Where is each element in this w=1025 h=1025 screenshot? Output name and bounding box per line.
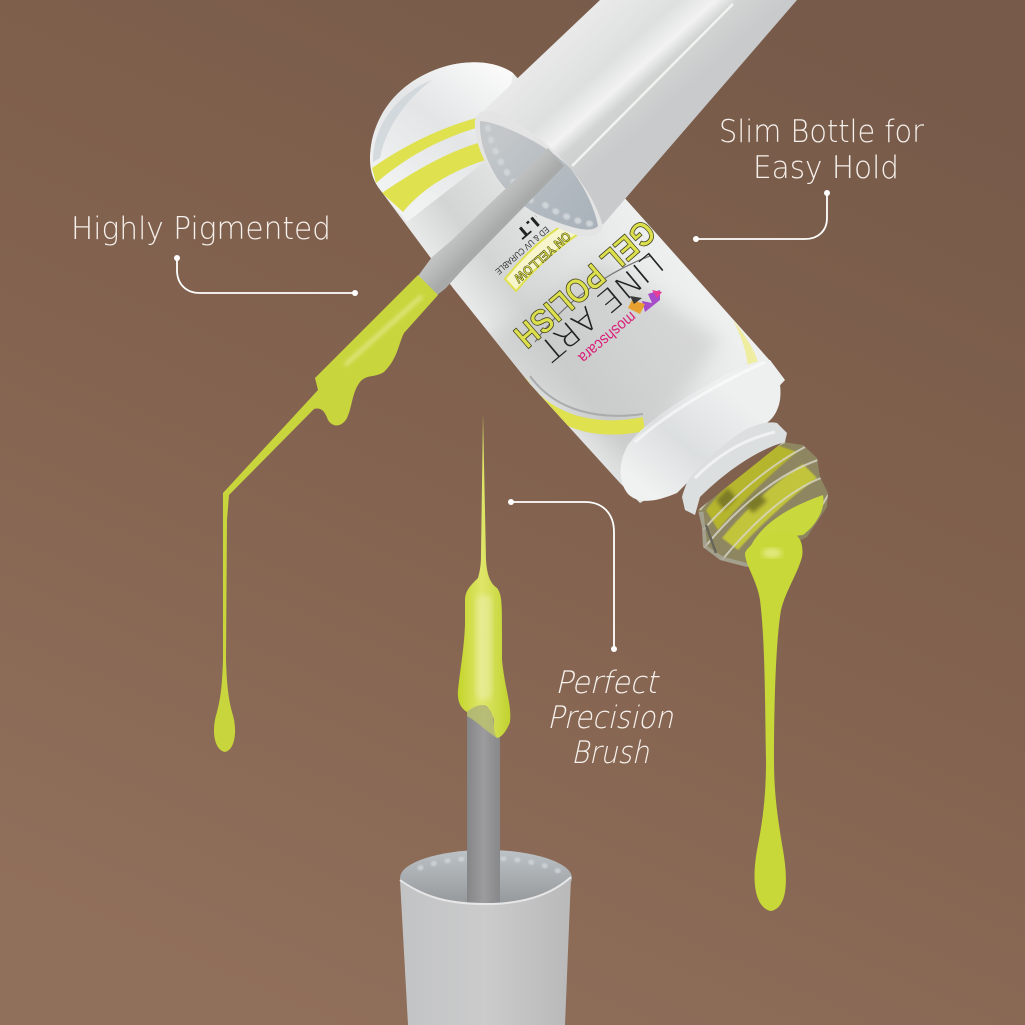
label: Easy Hold	[753, 150, 899, 186]
label: Highly Pigmented	[71, 211, 331, 247]
shoulder	[620, 360, 781, 501]
label: Perfect	[555, 665, 660, 701]
polish in opening	[747, 495, 823, 555]
leader line	[508, 499, 617, 652]
neon yellow pill: ON YELLOW	[511, 229, 574, 286]
holder rim	[400, 850, 572, 906]
UV curable text: ED & UV CURABLE	[493, 224, 551, 277]
cap tube	[475, 0, 797, 237]
drip body	[214, 275, 438, 752]
leader line	[693, 190, 830, 242]
leader line	[174, 255, 358, 296]
threaded glass neck	[698, 442, 828, 567]
bottle	[370, 62, 785, 503]
pour	[745, 532, 802, 911]
drip highlight	[345, 296, 422, 365]
volume mark: .I.T	[513, 209, 547, 242]
upper brush stem	[418, 148, 564, 296]
label: Precision	[547, 700, 673, 736]
highly pigmented brush with drip	[214, 275, 438, 752]
cap gloss line	[572, 4, 733, 166]
holder body	[400, 877, 571, 1025]
glass threads	[700, 442, 828, 567]
label: Brush	[571, 735, 649, 771]
highlight	[762, 548, 782, 558]
bottle neck and shoulder	[620, 360, 828, 567]
neck collar ring	[682, 422, 787, 515]
bottom cap holder	[400, 850, 572, 1025]
drip	[458, 414, 510, 738]
bottle label text	[493, 209, 670, 368]
moshscara brand logo	[575, 290, 662, 366]
GEL POLISH heading: GEL POLISH	[506, 212, 663, 355]
moshscara brand logo: moshscara	[575, 308, 639, 366]
LINE ART wordmark: LINE ART	[532, 244, 670, 368]
label: Slim Bottle for	[719, 114, 924, 150]
standing brush with drip	[458, 414, 510, 903]
callout: precision brush	[508, 499, 673, 771]
bottle body	[370, 62, 785, 503]
translucent drip over stem	[467, 705, 497, 738]
callout: slim bottle	[693, 114, 924, 242]
yellow stripes on bottle	[372, 118, 480, 183]
callout: highly pigmented	[71, 211, 358, 296]
stem	[467, 705, 500, 903]
drip highlight	[476, 595, 492, 700]
cap outer	[475, 0, 797, 228]
right pour stream	[745, 495, 823, 911]
holder stem through rim	[467, 850, 500, 903]
arc rule	[535, 256, 650, 342]
cap opening	[475, 111, 603, 237]
dome shading	[370, 62, 760, 460]
polish seen through the glass	[700, 442, 828, 567]
